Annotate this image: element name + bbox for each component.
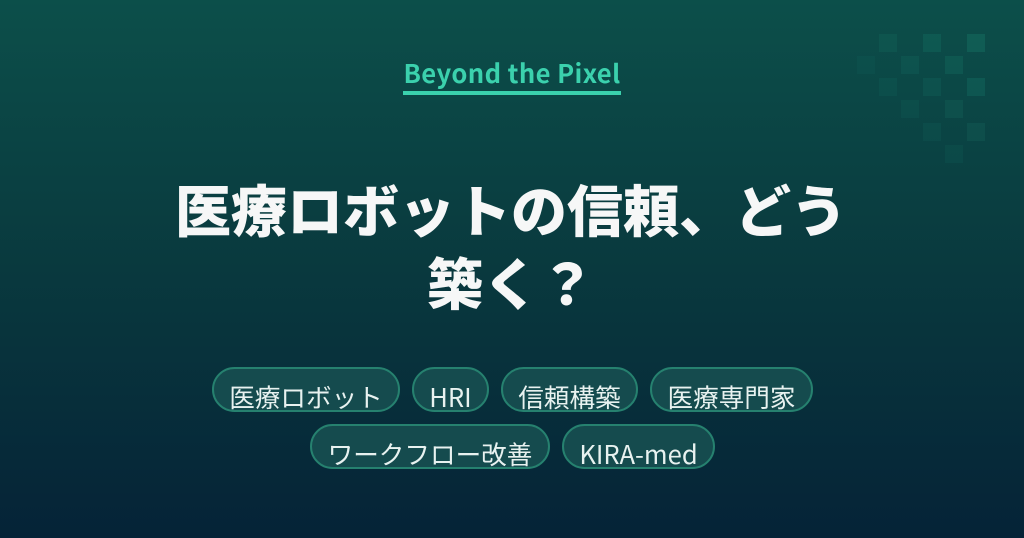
- tag: HRI: [412, 367, 489, 412]
- tag: HRI: HRI: [429, 378, 472, 415]
- tag: KIRA-med: [562, 424, 715, 469]
- title: 築く？: [427, 241, 595, 322]
- title: 医療ロボットの信頼、どう: [175, 168, 847, 249]
- tag: 信頼構築: 信頼構築: [518, 378, 621, 415]
- tag: KIRA-med: KIRA-med: [579, 435, 698, 472]
- tag: 医療ロボット: 医療ロボット: [229, 378, 383, 415]
- icon: pixel grid decoration: [879, 34, 985, 141]
- title: [175, 168, 847, 322]
- tag: 医療ロボット: [212, 367, 400, 412]
- tag: ワークフロー改善: [310, 424, 550, 469]
- heading: Beyond the Pixel brand label: Beyond the Pixel: [403, 54, 621, 91]
- tag: 信頼構築: [501, 367, 638, 412]
- tag list: [212, 367, 813, 472]
- tag: ワークフロー改善: ワークフロー改善: [328, 435, 532, 472]
- tag: 医療専門家: [650, 367, 813, 412]
- tag: 医療専門家: 医療専門家: [668, 378, 795, 415]
